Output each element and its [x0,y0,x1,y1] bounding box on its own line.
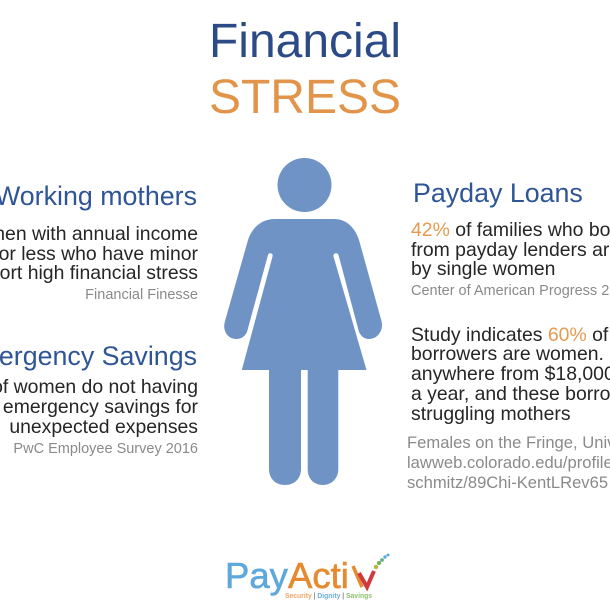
text block: emergency savings statistic: emergency savings for [3,396,199,418]
heading: working mothers: Working mothers [0,181,197,211]
source: females on the fringe: schmitz/89Chi-KentLRev65 [407,473,608,492]
panel: payday loans [407,178,610,492]
text block: working mothers statistic: or less who have minor [0,243,199,265]
logo: payactiv: Pay [225,555,289,596]
text block: working mothers statistic [0,223,199,284]
text block: 60 percent statistic [411,324,610,425]
text block: 60 percent statistic: Study indicates 60% of [411,324,609,346]
source: pwc survey: PwC Employee Survey 2016 [13,441,198,457]
source: females on the fringe [407,433,610,492]
panel: working mothers [0,181,199,303]
text block: emergency savings statistic [0,376,199,438]
text block: 42 percent statistic [411,219,610,280]
panel: emergency savings [0,341,199,457]
source: financial finesse: Financial Finesse [85,287,198,303]
source: center of american progress: Center of American Progress 2 [411,283,609,299]
text block: 60 percent statistic: anywhere from $18,000 [411,363,610,385]
title [209,15,401,124]
logo: payactiv [225,554,390,600]
logo: payactiv: Acti [288,555,349,596]
icon: check mark v with dots [353,554,390,587]
text block: 60 percent statistic: struggling mothers [411,403,571,425]
tagline: Security | Dignity | Savings [285,591,372,600]
text block: 42 percent statistic: by single women [411,258,555,280]
heading: payday loans: Payday Loans [413,178,583,208]
title: STRESS [209,71,401,124]
text block: 60 percent statistic: borrowers are women. [411,343,604,365]
text block: emergency savings statistic: unexpected expenses [9,416,198,438]
title: Financial [209,15,401,68]
icon: woman figure [224,158,382,485]
